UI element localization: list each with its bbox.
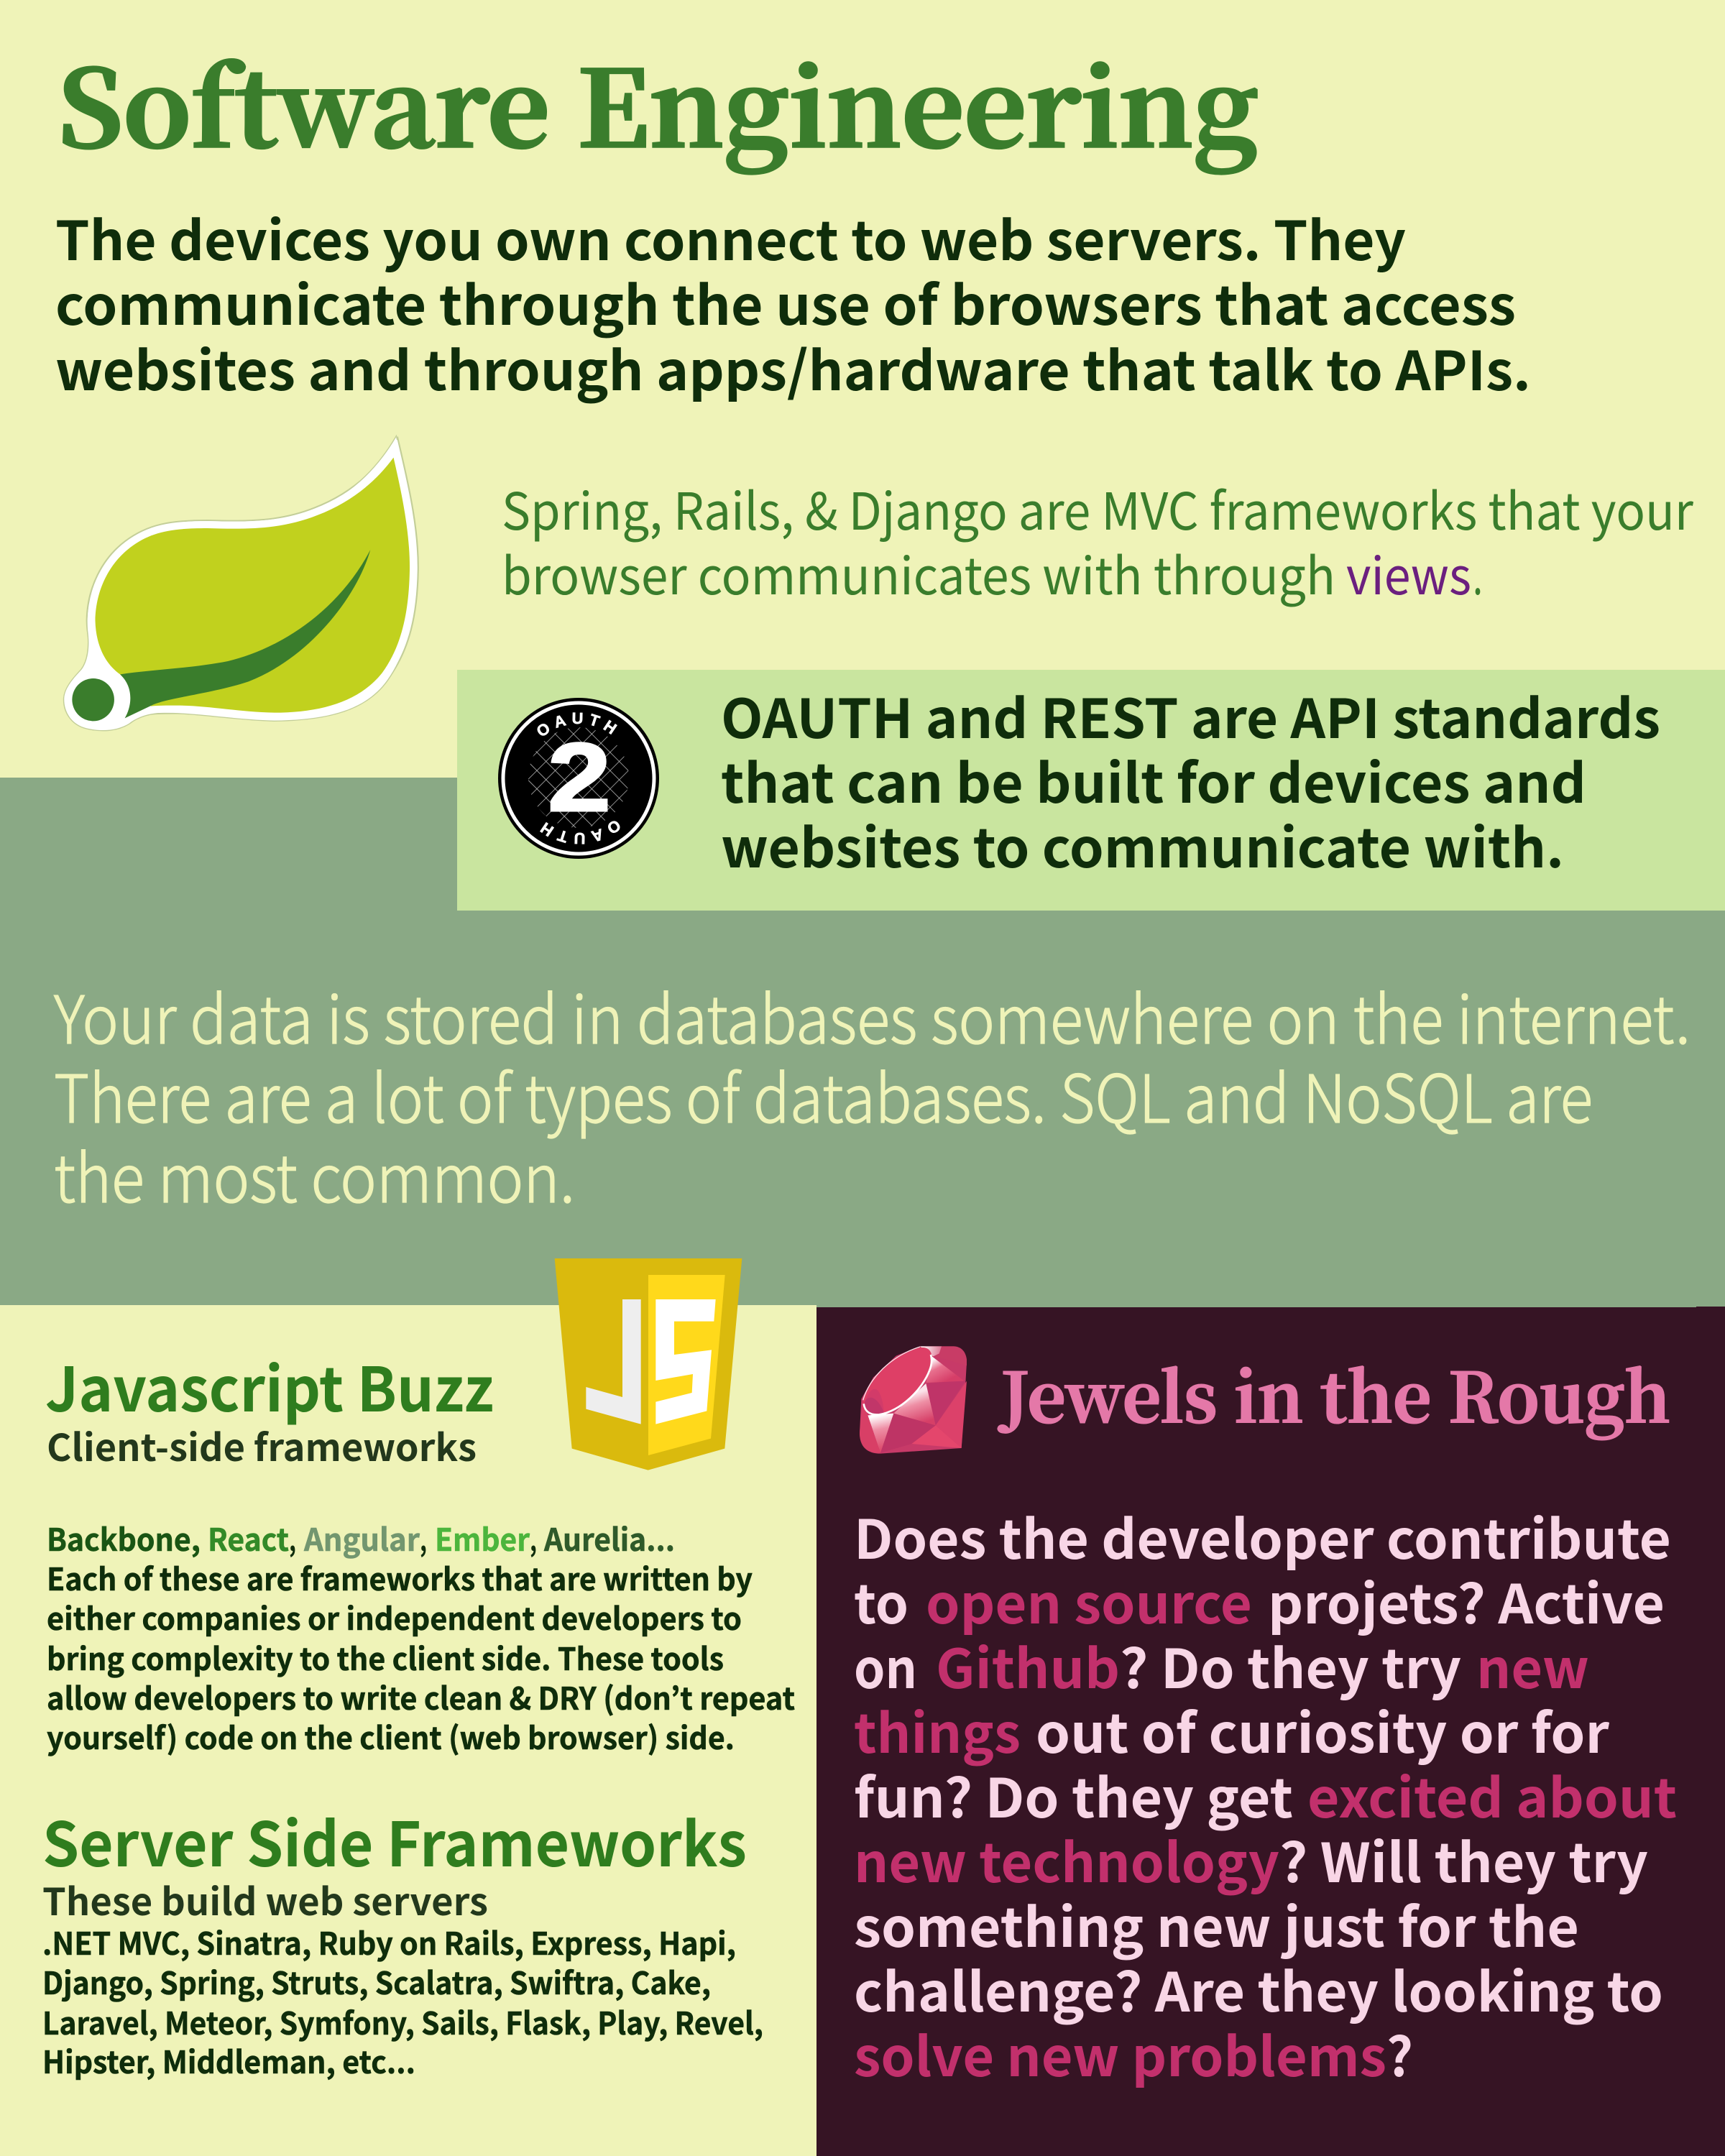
text: mvc frameworks <box>502 471 1693 609</box>
text: jewels description <box>854 1496 1677 2092</box>
text: jewels description: new technology <box>854 1820 1279 1898</box>
text: jewels description: excited about <box>1307 1755 1677 1833</box>
icon: oauth 2 badge: OAUTH <box>540 821 620 844</box>
text: server framework list <box>42 1920 763 2083</box>
text: server framework list: Hipster, Middleman, etc... <box>42 2038 415 2083</box>
text: server framework list: .NET MVC, Sinatra, Ruby on Rails, Express, Hapi, <box>42 1920 736 1964</box>
panel: jewels in the rough <box>816 1307 1725 2156</box>
text: mvc frameworks: . <box>1473 536 1483 609</box>
icon: spring leaf <box>64 437 416 730</box>
text: jewels description: Does the developer contribute <box>854 1496 1671 1575</box>
text: mvc frameworks: views <box>1346 536 1471 609</box>
text: jewels description: new <box>1476 1626 1589 1704</box>
text: client-side framework description <box>47 1516 795 1759</box>
text: jewels description: something new just for the <box>854 1884 1579 1963</box>
text: oauth and rest <box>721 676 1660 883</box>
text: client-side framework description: Backbone, <box>47 1516 201 1560</box>
text: jewels description: out of curiosity or for <box>1036 1690 1609 1769</box>
text: mvc frameworks: browser communicates with through <box>502 536 1335 609</box>
text: client-side framework description: allow developers to write clean & DRY (don’t repeat <box>47 1674 795 1719</box>
text: mvc frameworks: Spring, Rails, & Django are MVC frameworks that your <box>502 471 1693 545</box>
text: client-side framework description: React <box>208 1516 289 1560</box>
text: client-side framework description: bring complexity to the client side. These tools <box>47 1635 724 1680</box>
text: databases: the most common. <box>54 1126 575 1222</box>
intro text block <box>55 198 1531 406</box>
icon: ruby gem <box>860 1346 967 1454</box>
heading: javascript buzz: Javascript Buzz <box>45 1341 494 1429</box>
text: client-side framework description: , <box>530 1516 537 1560</box>
text: jewels description: Github <box>936 1626 1120 1704</box>
icon: oauth 2 badge: OAUTH <box>538 712 617 736</box>
title: Software Engineering <box>58 26 1259 177</box>
text: jewels description: projets? Active <box>1268 1561 1665 1639</box>
text: jewels description: ? Do they try <box>1120 1626 1461 1704</box>
icon: javascript shield <box>555 1258 742 1470</box>
intro text block: The devices you own connect to web servers. They <box>55 198 1406 276</box>
subheading: client-side frameworks: Client-side frameworks <box>47 1418 477 1472</box>
icon: oauth 2 badge <box>498 698 659 859</box>
text: jewels description: fun? Do they get <box>854 1755 1293 1833</box>
text: client-side framework description: Ember <box>435 1516 530 1560</box>
text: jewels description: challenge? Are they looking to <box>854 1949 1663 2027</box>
icon: oauth 2 badge: 2 <box>548 723 611 831</box>
text: jewels description: things <box>854 1690 1021 1769</box>
panel: database band <box>0 778 1725 1305</box>
text: client-side framework description: Aurelia... <box>543 1516 675 1560</box>
heading: server side frameworks: Server Side Frameworks <box>42 1796 747 1884</box>
text: jewels description: on <box>854 1626 917 1704</box>
text: server framework list: Laravel, Meteor, Symfony, Sails, Flask, Play, Revel, <box>42 1999 763 2044</box>
intro text block: websites and through apps/hardware that talk to APIs. <box>55 328 1531 406</box>
text: oauth and rest: OAUTH and REST are API standards <box>721 676 1660 754</box>
text: jewels description: open source <box>926 1561 1252 1639</box>
text: client-side framework description: , <box>289 1516 296 1560</box>
text: jewels description: ? <box>1386 2014 1413 2092</box>
intro text block: communicate through the use of browsers that access <box>55 262 1516 341</box>
text: jewels description: ? Will they try <box>1279 1820 1648 1898</box>
text: client-side framework description: Each of these are frameworks that are written by <box>47 1555 753 1600</box>
text: oauth and rest: that can be built for devices and <box>721 740 1586 819</box>
heading: jewels in the rough: Jewels in the Rough <box>998 1345 1670 1442</box>
text: client-side framework description: , <box>420 1516 427 1560</box>
text: jewels description: solve new problems <box>854 2014 1386 2092</box>
text: client-side framework description: yourself) code on the client (web browser) side. <box>47 1714 735 1759</box>
text: oauth and rest: websites to communicate with. <box>721 805 1564 883</box>
text: jewels description: to <box>854 1561 908 1639</box>
text: client-side framework description: either companies or independent developers to <box>47 1595 742 1639</box>
text: server framework list: Django, Spring, Struts, Scalatra, Swiftra, Cake, <box>42 1959 711 2004</box>
text: databases: There are a lot of types of databases. SQL and NoSQL are <box>54 1046 1593 1142</box>
text: client-side framework description: Angular <box>303 1516 420 1560</box>
subheading: these build web servers: These build web servers <box>42 1872 488 1926</box>
panel: oauth band <box>457 670 1725 911</box>
text: databases <box>54 967 1690 1222</box>
